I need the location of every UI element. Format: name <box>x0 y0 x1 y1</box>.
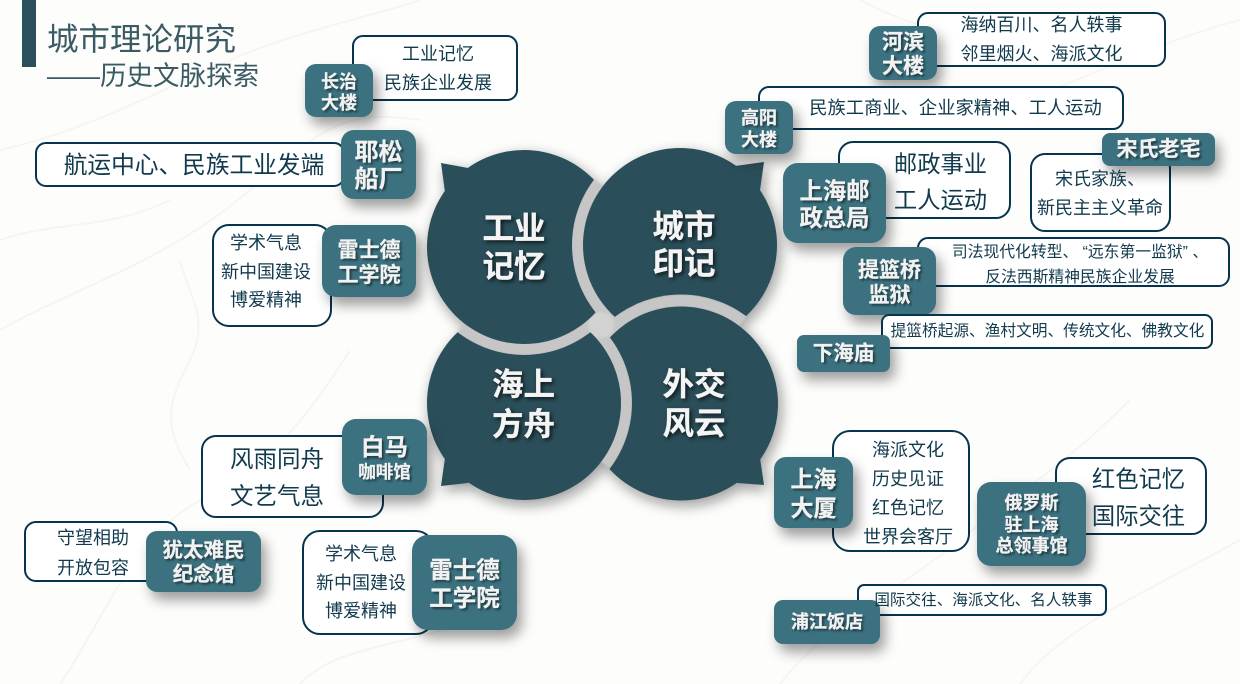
text: 雷士德工学院 themes: 学术气息 新中国建设 博爱精神 <box>316 544 406 621</box>
title accent bar <box>22 0 36 67</box>
badge: 长治大楼 <box>305 64 373 117</box>
text: 高阳大楼 themes: 民族工商业、企业家精神、工人运动 <box>809 97 1102 118</box>
node: 雷士德工学院 (海上方舟) <box>302 530 530 646</box>
node: 宋氏老宅 <box>1030 132 1228 232</box>
badge: 耶松船厂 <box>341 130 416 199</box>
badge: 俄罗斯驻上海总领事馆: 驻上海 <box>1004 515 1058 535</box>
text: 河滨大楼 themes: 海纳百川、名人轶事 邻里烟火、海派文化 <box>960 15 1122 64</box>
text: 耶松船厂 themes: 航运中心、民族工业发端 <box>64 153 324 179</box>
title: 城市理论研究 <box>47 21 236 57</box>
badge: 浦江饭店 <box>774 600 880 644</box>
badge: 俄罗斯驻上海总领事馆: 俄罗斯 <box>1004 493 1058 513</box>
petal: 外交风云: 风云 <box>662 405 726 441</box>
badge: 雷士德工学院: 雷士德 <box>429 557 500 583</box>
badge: 雷士德工学院: 雷士德 <box>338 238 400 262</box>
badge: 河滨大楼 <box>869 26 937 80</box>
badge: 雷士德工学院: 工学院 <box>429 585 500 611</box>
text: 俄罗斯领事馆 themes: 红色记忆 国际交往 <box>1092 466 1185 528</box>
node: 浦江饭店 <box>770 584 1107 660</box>
petal: 海上方舟: 海上 <box>492 366 555 402</box>
badge: 雷士德工学院 <box>322 225 416 297</box>
badge: 长治大楼: 大楼 <box>321 93 357 113</box>
node: 高阳大楼 <box>722 86 1124 170</box>
text: 浦江饭店 themes: 国际交往、海派文化、名人轶事 <box>874 592 1093 609</box>
badge: 上海邮政总局: 政总局 <box>800 205 869 231</box>
text: 长治大楼 themes: 工业记忆 民族企业发展 <box>384 44 492 92</box>
title <box>47 21 259 91</box>
ring of grey between petals <box>461 183 743 465</box>
petal: 海上方舟 <box>427 332 621 500</box>
node: 上海邮政总局 <box>780 141 1011 260</box>
badge: 宋氏老宅: 宋氏老宅 <box>1116 138 1200 161</box>
petal: 工业记忆 <box>427 150 596 344</box>
badge: 犹太难民纪念馆: 犹太难民 <box>162 538 244 562</box>
badge: 上海大厦 <box>774 457 853 528</box>
badge: 宋氏老宅 <box>1102 133 1215 166</box>
node: 上海大厦 <box>770 430 970 552</box>
badge: 上海邮政总局: 上海邮 <box>800 178 869 204</box>
badge: 上海大厦: 大厦 <box>790 495 836 521</box>
petal: 工业记忆: 工业 <box>482 210 546 246</box>
badge: 提篮桥监狱: 监狱 <box>868 284 910 306</box>
badge: 俄罗斯驻上海总领事馆 <box>977 482 1086 566</box>
badge: 浦江饭店: 浦江饭店 <box>791 612 863 632</box>
badge: 提篮桥监狱: 提篮桥 <box>858 258 921 282</box>
badge: 下海庙: 下海庙 <box>813 342 874 365</box>
badge: 长治大楼: 长治 <box>321 72 357 92</box>
text: 白马咖啡馆 themes: 风雨同舟 文艺气息 <box>230 446 324 508</box>
badge: 高阳大楼: 高阳 <box>741 108 777 128</box>
petal: 外交风云: 外交 <box>662 366 726 402</box>
node: 长治大楼 <box>302 35 518 134</box>
badge: 犹太难民纪念馆: 纪念馆 <box>173 563 234 586</box>
badge: 高阳大楼 <box>725 101 793 154</box>
badge: 高阳大楼: 大楼 <box>741 130 777 150</box>
badge: 上海邮政总局 <box>783 163 886 243</box>
badge: 耶松船厂: 船厂 <box>354 166 402 193</box>
node: 河滨大楼 <box>866 12 1166 86</box>
petal: 城市印记: 印记 <box>652 245 716 281</box>
petal: 城市印记: 城市 <box>652 208 716 244</box>
text: 上海邮政总局 themes: 邮政事业 工人运动 <box>894 151 987 213</box>
petal: 海上方舟: 方舟 <box>492 406 555 442</box>
text: 上海大厦 themes: 海派文化 历史见证 红色记忆 世界会客厅 <box>863 440 953 546</box>
badge: 雷士德工学院: 工学院 <box>338 264 400 286</box>
badge: 白马咖啡馆 <box>342 419 427 495</box>
text: 宋氏老宅 themes: 宋氏家族、 新民主主义革命 <box>1037 169 1163 218</box>
title: ——历史文脉探索 <box>47 61 259 91</box>
node: 提篮桥监狱 <box>840 237 1230 332</box>
badge: 下海庙 <box>797 335 890 372</box>
text: 雷士德工学院 themes: 学术气息 新中国建设 博爱精神 <box>221 233 311 310</box>
badge: 白马咖啡馆: 咖啡馆 <box>358 462 411 482</box>
text: 提篮桥监狱 themes: 司法现代化转型、 “远东第一监狱” 、 反法西斯精神民族企业发展 <box>952 244 1208 286</box>
node: 耶松船厂 <box>35 130 430 216</box>
badge: 河滨大楼: 大楼 <box>882 55 924 78</box>
badge: 白马咖啡馆: 白马 <box>361 434 408 460</box>
text: 下海庙 themes: 提篮桥起源、渔村文明、传统文化、佛教文化 <box>891 323 1204 340</box>
badge: 俄罗斯驻上海总领事馆: 总领事馆 <box>996 536 1068 556</box>
petal: 外交风云 <box>610 306 778 500</box>
petal: 工业记忆: 记忆 <box>482 248 546 284</box>
node: 白马咖啡馆 <box>201 418 440 518</box>
badge: 河滨大楼: 河滨 <box>882 31 924 54</box>
badge: 耶松船厂: 耶松 <box>354 139 402 166</box>
badge: 提篮桥监狱 <box>843 247 936 315</box>
node: 雷士德工学院 (工业记忆) <box>212 224 430 327</box>
node: 下海庙 <box>794 314 1213 388</box>
text: 犹太难民纪念馆 themes: 守望相助 开放包容 <box>57 528 129 578</box>
badge: 上海大厦: 上海 <box>790 466 836 492</box>
badge: 雷士德工学院 <box>412 535 517 630</box>
central four-petal diagram <box>421 144 790 514</box>
node: 俄罗斯驻上海总领事馆 <box>974 457 1207 582</box>
petal: 城市印记 <box>583 148 777 317</box>
node: 犹太难民纪念馆 <box>24 521 274 608</box>
badge: 犹太难民纪念馆 <box>146 531 261 592</box>
